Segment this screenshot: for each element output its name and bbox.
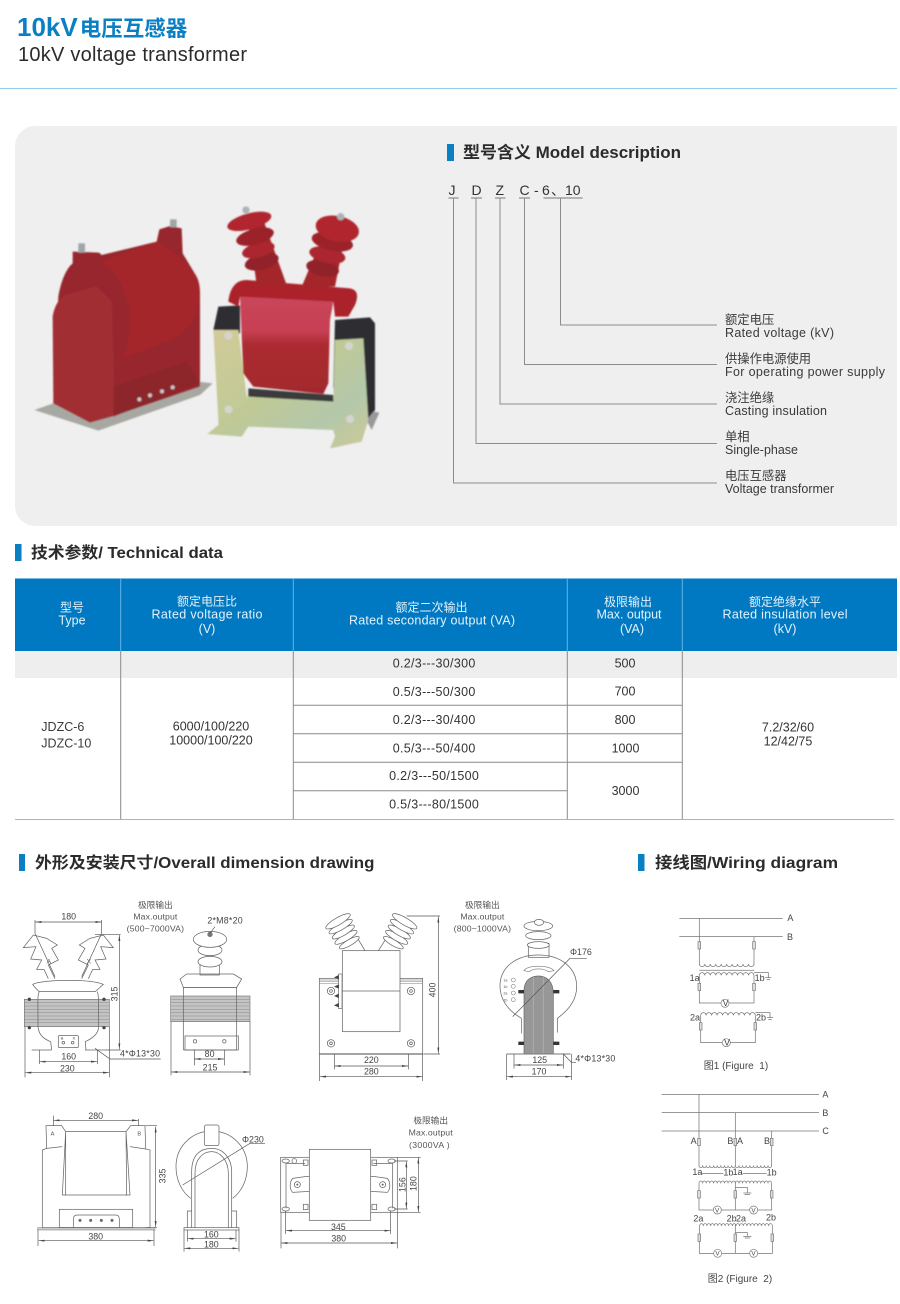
table header: 极限输出 — [604, 594, 652, 609]
front view — [38, 1111, 167, 1246]
table header: Rated secondary output (VA) — [349, 613, 515, 627]
model description labels: 供操作电源使用 — [725, 351, 811, 366]
side view: 180 — [204, 1240, 219, 1250]
product photo: cast transformers — [34, 206, 379, 448]
title — [17, 12, 247, 66]
table body — [41, 657, 814, 811]
table body: 700 — [615, 685, 635, 699]
title: 10kV电压互感器 — [17, 12, 188, 42]
wiring diagram: figure 2: A — [822, 1090, 828, 1100]
model description labels: 电压互感器 — [725, 468, 786, 483]
model description labels: 单相 — [725, 430, 750, 444]
side view: 2a — [503, 992, 508, 996]
side view: 2b — [503, 998, 507, 1002]
table header: 额定电压比 — [177, 594, 237, 609]
table body: 12/42/75 — [764, 735, 812, 749]
side view: 2*M8*20 — [207, 915, 243, 925]
wiring diagram: figure 2: 1a — [733, 1167, 743, 1177]
rating note: 极限输出 — [413, 1115, 448, 1126]
table body: 800 — [615, 713, 635, 727]
table body: JDZC-10 — [41, 737, 91, 751]
table body: 10000/100/220 — [169, 734, 253, 748]
side view: 80 — [205, 1049, 215, 1059]
wiring diagram: figure 2: 1a — [692, 1167, 702, 1177]
front view: 280 — [88, 1111, 103, 1121]
rating note: Max.output — [133, 912, 178, 922]
wiring diagram: figure 1 — [679, 913, 793, 1072]
wiring diagram: figure 2: 2a — [736, 1213, 746, 1223]
dimension lines: 400 — [428, 983, 438, 997]
heading: technical data: 技术参数/ Technical data — [31, 543, 223, 562]
dimension lines: 345 — [331, 1222, 346, 1232]
heading: model description: 型号含义 Model description — [463, 142, 681, 162]
rating note: 极限输出 — [465, 899, 500, 910]
model code letters with leader lines: 、 — [551, 182, 565, 198]
wiring diagram: figure 1: A — [787, 913, 793, 923]
title: 10kV voltage transformer — [18, 44, 247, 66]
model code letters with leader lines: 6 — [542, 182, 550, 198]
table header: Rated voltage ratio — [152, 607, 263, 621]
rating note — [409, 1115, 453, 1150]
wiring diagram: figure 2: V — [751, 1251, 756, 1258]
laminated core front — [24, 999, 109, 1027]
side view: 4*Φ13*30 — [575, 1054, 615, 1064]
table body: 6000/100/220 — [173, 720, 249, 734]
model description labels: For operating power supply — [725, 365, 886, 379]
table header: 额定二次输出 — [395, 600, 468, 615]
table header: Max. output — [596, 607, 662, 621]
panel: product and model description — [15, 126, 897, 526]
table body: 0.5/3---50/300 — [393, 685, 475, 699]
wiring diagram: figure 2: V — [751, 1207, 756, 1214]
rating note — [454, 899, 511, 934]
dimension lines: 4*Φ13*30 — [120, 1049, 160, 1059]
side view: 215 — [203, 1063, 217, 1073]
dimension lines: 156 — [397, 1177, 407, 1192]
dimension lines: 180 — [61, 911, 76, 921]
rating note: 极限输出 — [138, 899, 173, 910]
rating note: Max.output — [409, 1128, 453, 1138]
table body: 0.2/3---50/1500 — [389, 769, 479, 783]
wiring diagram: figure 1: 2a — [690, 1013, 700, 1023]
table body: 7.2/32/60 — [762, 721, 814, 735]
drawing 4: plan view, 3000VA — [281, 1115, 453, 1248]
side view: Φ230 — [242, 1134, 264, 1144]
drawing 3: front and side views — [38, 1111, 265, 1252]
model description labels: Single-phase — [725, 443, 798, 457]
table header: 型号 — [60, 601, 84, 615]
wiring diagram: figure 2: 2a — [693, 1213, 703, 1223]
drawing 1: front and side views, 500~7000VA: X — [87, 958, 92, 965]
wiring diagram: figure 1: 1b — [755, 973, 765, 983]
rating note: (500~7000VA) — [127, 923, 184, 933]
rating note: Max.output — [460, 912, 505, 922]
wiring diagram: figure 1: 2b — [756, 1012, 766, 1022]
wiring diagram: figure 2: A — [691, 1136, 697, 1146]
table body: 0.2/3---30/400 — [393, 713, 475, 727]
table body: 1000 — [612, 741, 639, 755]
side view: 125 — [532, 1055, 547, 1065]
rating note: (800~1000VA) — [454, 924, 511, 934]
side view: 1b — [503, 985, 507, 989]
rating note: (3000VA ) — [409, 1140, 450, 1150]
table header: 额定绝缘水平 — [749, 594, 821, 609]
dimension lines — [281, 1157, 421, 1248]
dimension lines: 160 — [61, 1052, 76, 1062]
table body: 3000 — [612, 784, 639, 798]
wiring diagram: figure 2: V — [715, 1251, 720, 1258]
drawing 1: front and side views, 500~7000VA: x — [73, 1035, 76, 1041]
table body: 0.5/3---80/1500 — [389, 797, 479, 811]
dimension lines: 315 — [109, 987, 119, 1001]
insulators — [324, 911, 419, 951]
side view — [500, 919, 615, 1080]
dimension lines — [320, 916, 440, 1081]
wiring diagram: figure 2: C — [822, 1126, 829, 1136]
table header: (V) — [199, 622, 215, 636]
model description labels: Casting insulation — [725, 404, 827, 418]
model description labels: Voltage transformer — [725, 482, 834, 496]
model code letters with leader lines: C — [520, 182, 530, 198]
table header: Type — [58, 613, 86, 627]
wiring diagram: figure 2: 2b — [727, 1213, 737, 1223]
side view — [171, 915, 250, 1075]
laminated core — [319, 951, 423, 1055]
table header — [58, 594, 848, 636]
side view — [176, 1125, 265, 1252]
model description labels: Rated voltage (kV) — [725, 326, 834, 340]
wiring diagram: figure 1: B — [787, 932, 793, 942]
model code letters with leader lines: D — [472, 182, 482, 198]
drawing 1: front and side views, 500~7000VA: a — [61, 1035, 64, 1041]
rating note — [127, 899, 184, 933]
dimension lines: 380 — [331, 1234, 346, 1244]
wiring diagram: figure 2: 1b — [767, 1168, 777, 1178]
front view: 380 — [88, 1232, 103, 1242]
model description labels — [725, 312, 886, 496]
wiring diagram: figure 2: 2b — [766, 1213, 776, 1223]
side view: Φ176 — [570, 947, 592, 957]
side view: 160 — [204, 1230, 219, 1240]
dimension lines: 280 — [364, 1067, 379, 1077]
wiring diagram: figure 2: 1b — [723, 1168, 733, 1178]
heading: wiring diagram: 接线图/Wiring diagram — [655, 853, 838, 872]
wiring diagram: figure 1: V — [724, 1037, 730, 1047]
wiring diagram: figure 2: 图2 (Figure 2) — [708, 1273, 772, 1285]
wiring diagram: figure 2: A — [737, 1136, 743, 1146]
table header: (kV) — [774, 622, 796, 636]
model code letters with leader lines: J — [448, 182, 456, 198]
dimension lines: 180 — [409, 1176, 419, 1191]
wiring diagram: figure 1: 1a — [690, 973, 700, 983]
drawing 1: front and side views, 500~7000VA: A — [47, 958, 52, 965]
dimension lines: 230 — [60, 1063, 75, 1073]
wiring diagram: figure 2: V — [715, 1207, 720, 1214]
table body: 0.2/3---30/300 — [393, 657, 475, 671]
side view: 170 — [532, 1067, 546, 1077]
wiring diagram: figure 1: V — [723, 998, 729, 1008]
side view: 1a — [503, 979, 508, 983]
table header: (VA) — [620, 622, 644, 636]
front view: A — [51, 1132, 55, 1138]
dimension lines: 220 — [364, 1055, 379, 1065]
table body: JDZC-6 — [41, 720, 84, 734]
dimension lines — [25, 911, 161, 1077]
table body: 500 — [615, 657, 635, 671]
wiring diagram: figure 1: 图1 (Figure 1) — [704, 1060, 768, 1072]
table header: Rated insulation level — [722, 607, 848, 621]
table body: 0.5/3---50/400 — [393, 741, 475, 755]
model code letters with leader lines: - — [534, 182, 539, 198]
wiring diagram: figure 2 — [662, 1090, 829, 1285]
drawing 2: front and side views, 800~1000VA — [319, 899, 615, 1081]
model description labels: 浇注绝缘 — [725, 390, 774, 405]
wiring diagram: figure 2: B — [727, 1136, 733, 1146]
front view: B — [137, 1132, 141, 1138]
model description labels: 额定电压 — [725, 312, 774, 327]
model code letters with leader lines: Z — [496, 182, 504, 198]
front view: 335 — [157, 1169, 167, 1183]
table: technical data — [15, 578, 897, 820]
drawing 1: front and side views, 500~7000VA — [23, 899, 250, 1077]
model code letters with leader lines: 10 — [565, 182, 581, 198]
wiring diagram: figure 2: B — [764, 1136, 770, 1146]
model code letters with leader lines — [448, 182, 717, 483]
wiring diagram: figure 2: B — [822, 1108, 828, 1118]
heading: overall dimension drawing: 外形及安装尺寸/Overall dimension drawing — [35, 853, 374, 872]
